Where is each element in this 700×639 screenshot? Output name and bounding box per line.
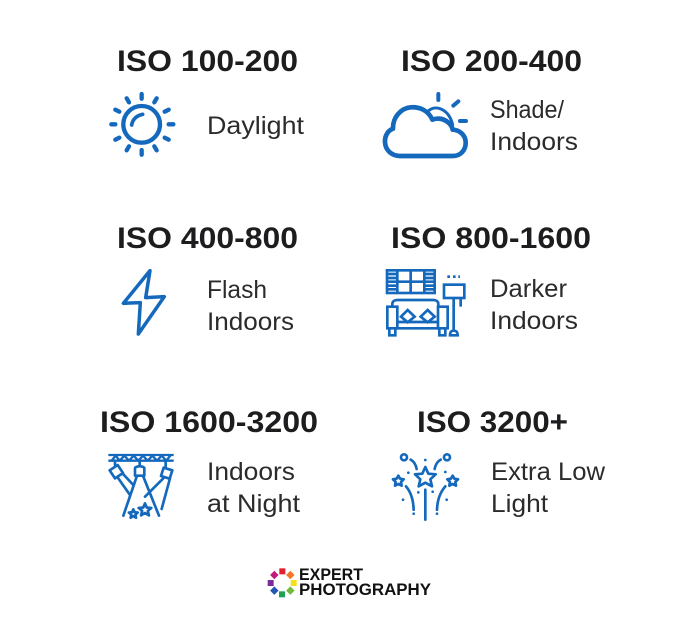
label: Shade/ Indoors <box>490 96 578 156</box>
label: Flash Indoors: Flash <box>207 276 267 304</box>
label: Indoors at Night: Indoors <box>207 458 295 486</box>
label: Daylight: Daylight <box>207 112 304 140</box>
heading: ISO 400-800: ISO 400-800 <box>117 222 298 255</box>
logo text: PHOTOGRAPHY <box>299 580 432 599</box>
label: Extra Low Light: Light <box>491 490 548 518</box>
label: Indoors at Night: at Night <box>207 490 300 518</box>
icon: sofa, window and lamp <box>387 270 464 335</box>
heading: ISO 3200+: ISO 3200+ <box>417 406 568 439</box>
logo text <box>299 565 432 599</box>
icon: sun <box>111 94 173 155</box>
icon: stage spotlights and stars <box>108 455 174 518</box>
heading: ISO 800-1600: ISO 800-1600 <box>391 222 591 255</box>
label: Flash Indoors: Indoors <box>207 308 294 336</box>
icon: lightning bolt <box>123 271 164 334</box>
logo: Expert Photography <box>268 565 432 599</box>
icon: cloud and sun <box>385 94 466 156</box>
logo mark: colour ring <box>268 568 297 597</box>
heading: ISO 200-400: ISO 200-400 <box>401 45 582 78</box>
label: Darker Indoors <box>490 275 578 335</box>
label: Darker Indoors: Indoors <box>490 307 578 335</box>
heading: ISO 100-200: ISO 100-200 <box>117 45 298 78</box>
icon: fireworks <box>393 454 458 520</box>
label: Shade/ Indoors: Indoors <box>490 128 578 156</box>
logo text: EXPERT <box>299 565 364 584</box>
label: Darker Indoors: Darker <box>490 275 567 303</box>
label: Extra Low Light <box>491 458 606 518</box>
label: Indoors at Night <box>207 458 300 518</box>
label: Extra Low Light: Extra Low <box>491 458 606 486</box>
label: Shade/ Indoors: Shade/ <box>490 96 564 124</box>
heading: ISO 1600-3200: ISO 1600-3200 <box>100 406 318 439</box>
label: Flash Indoors <box>207 276 294 336</box>
